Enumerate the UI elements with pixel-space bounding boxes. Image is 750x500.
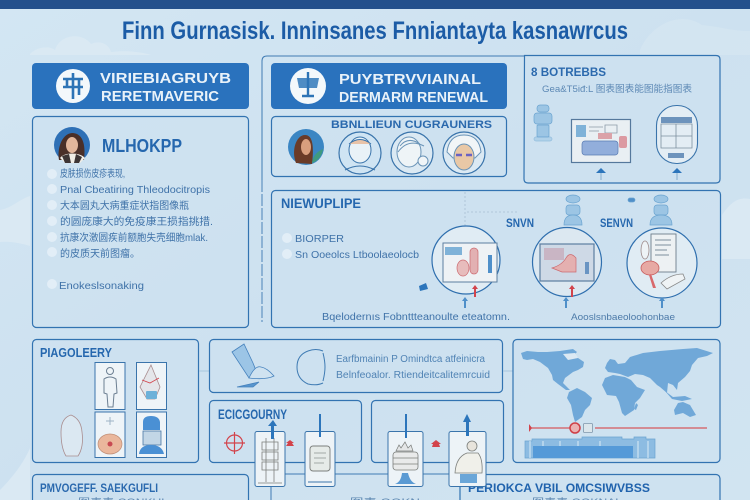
new uplipe text <box>282 233 419 261</box>
right header <box>271 63 507 109</box>
bottom left heading: PMVOGEFF. SAEKGUFLI <box>40 481 158 495</box>
panel: resources <box>524 56 720 183</box>
profile text <box>59 167 213 292</box>
icon: red target <box>224 432 245 454</box>
icon: robot two <box>564 195 582 225</box>
circle: diagram two <box>532 228 602 296</box>
new uplipe right caption: Aooslsnbaeoloohonbae <box>571 312 675 323</box>
profile bullets <box>47 169 57 289</box>
resources heading: 8 BOTREBBS <box>531 65 606 79</box>
panel: portraits <box>272 116 506 176</box>
icon: blue feather <box>232 344 274 387</box>
icon: tissue card <box>95 412 125 458</box>
new uplipe text: BIORPER <box>295 234 344 245</box>
icon: robot figure <box>534 105 552 141</box>
label: SENVN: SENVN <box>600 216 633 230</box>
card: figure <box>449 432 486 486</box>
new uplipe heading: NIEWUPLIPE <box>281 196 361 211</box>
icon: header emblem left <box>56 69 90 103</box>
icon: circular report <box>656 106 698 164</box>
new uplipe text: Sn Ooeolcs Ltboolaeolocb <box>295 250 419 261</box>
icon: portrait elder <box>443 132 485 174</box>
red arrow <box>286 440 294 446</box>
portraits heading: BBNLLIEUN CUGRAUNERS <box>331 119 492 131</box>
icon: robot three <box>628 195 672 225</box>
arrow: stack <box>405 414 407 438</box>
profile text: Enokeslsonaking <box>59 281 144 292</box>
profile text: 大本圆丸大病重症状指图像瓶 <box>60 199 189 212</box>
arrow: scaffold up <box>268 420 277 439</box>
ecogurny heading: ECICGOURNY <box>218 407 287 422</box>
panel: bottom left <box>32 474 248 500</box>
icon: chart document <box>572 120 630 162</box>
small blue arrows <box>462 297 665 308</box>
icon: mask face card <box>136 412 166 458</box>
icon: marker pin <box>419 283 428 291</box>
panel: left header <box>32 63 249 109</box>
arrow: figure <box>463 414 471 436</box>
piagoleery heading: PIAGOLEERY <box>40 345 112 360</box>
profile text: 的圆庞康大的免疫康王损指挑措. <box>60 215 213 228</box>
feather text <box>336 354 490 381</box>
card: clipboard <box>305 432 335 486</box>
icon: mask card <box>136 362 166 410</box>
resources caption: Gea&T5iđ:L 图表图表能图能指图表 <box>542 83 693 95</box>
connector <box>199 370 209 372</box>
icon: portrait color <box>288 129 324 165</box>
red arrow: process <box>431 440 441 447</box>
feather text: Earfbmainin P Omindtca atfeinicra <box>336 354 485 365</box>
panel: outer review frame <box>262 56 524 322</box>
arrow: clipboard <box>319 414 321 437</box>
profile text: 抗康次激圆疾前额胞失壳细胞mlak. <box>60 231 208 244</box>
left header text: RERETMAVERIC <box>101 89 220 105</box>
icon: city skyline <box>525 437 655 458</box>
icon: ring <box>297 350 325 385</box>
left header text: VIRIEBIAGRUYB <box>100 71 231 87</box>
arrows: resources <box>596 168 682 180</box>
right header text: PUYBTRVVIAINAL <box>339 71 481 88</box>
icon: torso outline <box>61 415 82 456</box>
icon: portrait woman <box>391 132 433 174</box>
panel: feather <box>210 340 502 392</box>
icon: header emblem right <box>290 68 326 104</box>
icon: portrait man <box>339 132 381 174</box>
card: scaffold <box>255 432 285 486</box>
connector <box>503 370 513 372</box>
panel: second process <box>372 400 504 462</box>
bottom right heading: PERIOKCA VBIL OMCSIWVBSS <box>468 481 650 495</box>
world map <box>521 348 713 422</box>
red arrow one <box>472 285 478 297</box>
circle: diagram one <box>432 226 500 294</box>
icon: body card <box>95 362 125 410</box>
panel: ecogurny <box>210 400 362 462</box>
panel: bottom right <box>460 474 720 500</box>
feather text: Belnfeoalor. Rtiendeitcalitemrcuid <box>336 370 490 381</box>
circle: organ diagram <box>627 228 697 298</box>
profile text: Pnal Cbeatiring Thleodocitropis <box>60 185 210 196</box>
panel: new uplipe <box>272 190 720 328</box>
map marker line <box>529 423 707 433</box>
label: SNVN: SNVN <box>506 216 534 230</box>
panel: map <box>513 340 720 462</box>
card: stack <box>388 432 423 486</box>
icon: profile portrait <box>54 127 90 163</box>
new uplipe left caption: Bqelodernıs Fobnttteanoulte eteatomn. <box>322 312 510 323</box>
connector lines <box>271 474 460 500</box>
right header text: DERMARM RENEWAL <box>339 89 488 106</box>
top bar <box>0 0 750 9</box>
profile heading: MLHOKPP <box>102 136 182 156</box>
title: Finn Gurnasisk. Inninsanes Fnniantayta kasnawrcus <box>122 17 628 45</box>
dotted guides <box>465 192 519 232</box>
red arrow two <box>569 285 575 297</box>
profile text: 的皮质天前图瘤。 <box>60 247 140 260</box>
profile text: 皮肤损伤皮疹表现, <box>60 167 125 180</box>
panel: profile <box>32 116 248 328</box>
panel: piagoleery <box>32 340 198 462</box>
